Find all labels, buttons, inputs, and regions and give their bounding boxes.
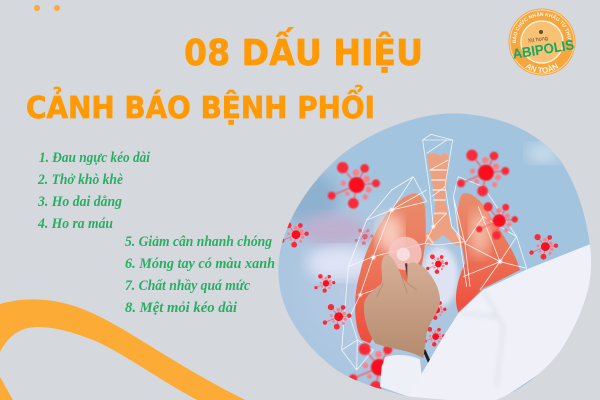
symptom list left: 1. Đau ngực kéo dài	[39, 150, 151, 166]
title line 1: 08 DẤU HIỆU	[184, 27, 423, 74]
polygon wire lungs	[342, 134, 527, 370]
left lung	[355, 193, 426, 343]
stethoscope	[388, 237, 431, 365]
orange swoosh	[0, 299, 245, 400]
logo badge: BẢO CHỨC NHẬN KHẨU TỪ THỰC	[512, 12, 572, 44]
symptom list right: 8. Mệt mỏi kéo dài	[125, 300, 238, 316]
hand	[364, 255, 440, 358]
logo badge: ABIPOLIS	[511, 36, 575, 62]
symptom list right	[125, 234, 275, 316]
white coat	[408, 244, 595, 400]
symptom list left	[37, 150, 151, 232]
right lung	[456, 193, 520, 313]
symptom list left: 2. Thở khò khè	[37, 172, 123, 188]
photo background sky	[270, 107, 600, 400]
decorative dots	[34, 5, 60, 11]
viruses	[328, 162, 380, 209]
title line 2: CẢNH BÁO BỆNH PHỔI	[26, 84, 375, 126]
logo badge: Xịt họng	[527, 36, 548, 44]
trachea	[425, 154, 462, 246]
symptom list right: 7. Chất nhầy quá mức	[125, 278, 250, 294]
symptom list right: 5. Giảm cân nhanh chóng	[125, 234, 272, 250]
symptom list left: 3. Ho dai dẳng	[37, 194, 122, 210]
photo: doctor examining lungs	[270, 107, 600, 400]
symptom list right: 6. Móng tay có màu xanh	[125, 256, 275, 272]
symptom list left: 4. Ho ra máu	[37, 216, 113, 232]
shirt cuff	[380, 355, 422, 397]
logo badge: AN TOÀN	[525, 63, 558, 73]
logo badge	[508, 8, 576, 76]
